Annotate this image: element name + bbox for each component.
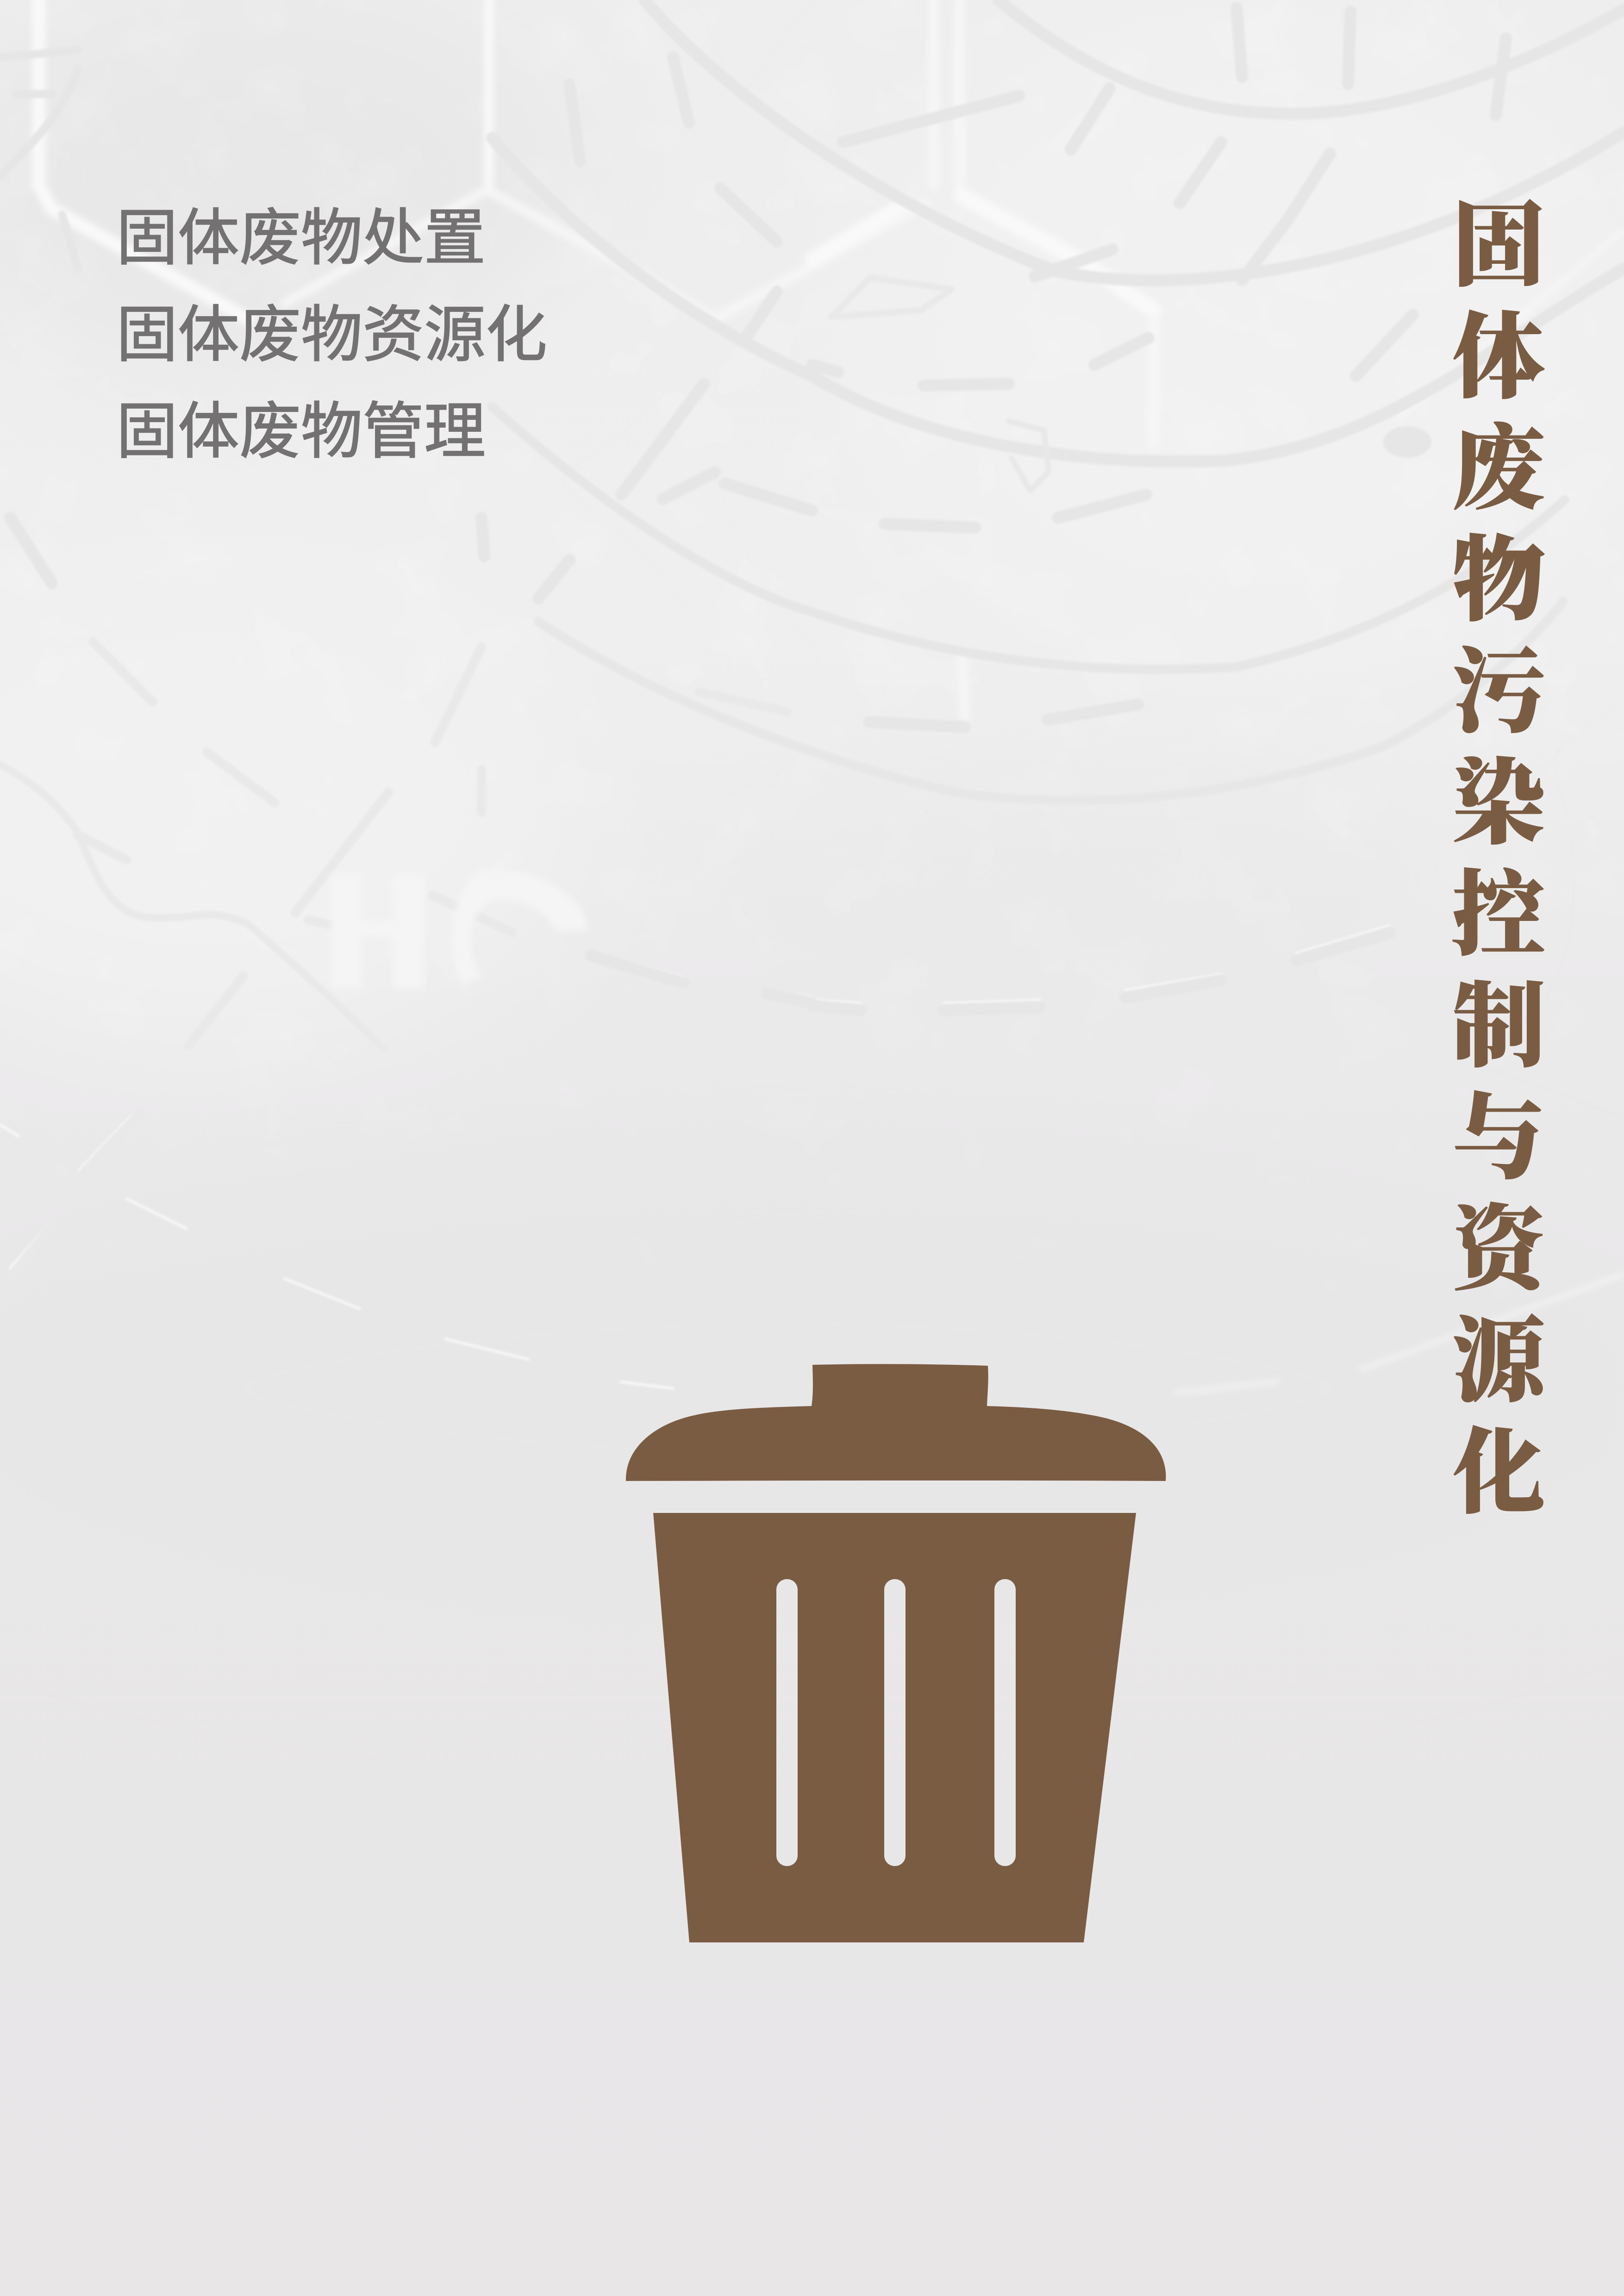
title: vertical heading: 固体废物污染控制与资源化: [1439, 196, 1541, 1535]
subtitle: 固体废物资源化: 固体废物资源化: [116, 301, 547, 369]
bin body with slots: [653, 1513, 1136, 1942]
text block: three subtitles: [0, 0, 556, 467]
background: pale map texture: [0, 0, 1624, 1389]
icon: brown trash bin: [620, 1361, 1176, 1948]
bin lid: [626, 1364, 1166, 1481]
subtitle: 固体废物管理: 固体废物管理: [116, 398, 486, 466]
subtitle: 固体废物处置: 固体废物处置: [116, 204, 486, 273]
